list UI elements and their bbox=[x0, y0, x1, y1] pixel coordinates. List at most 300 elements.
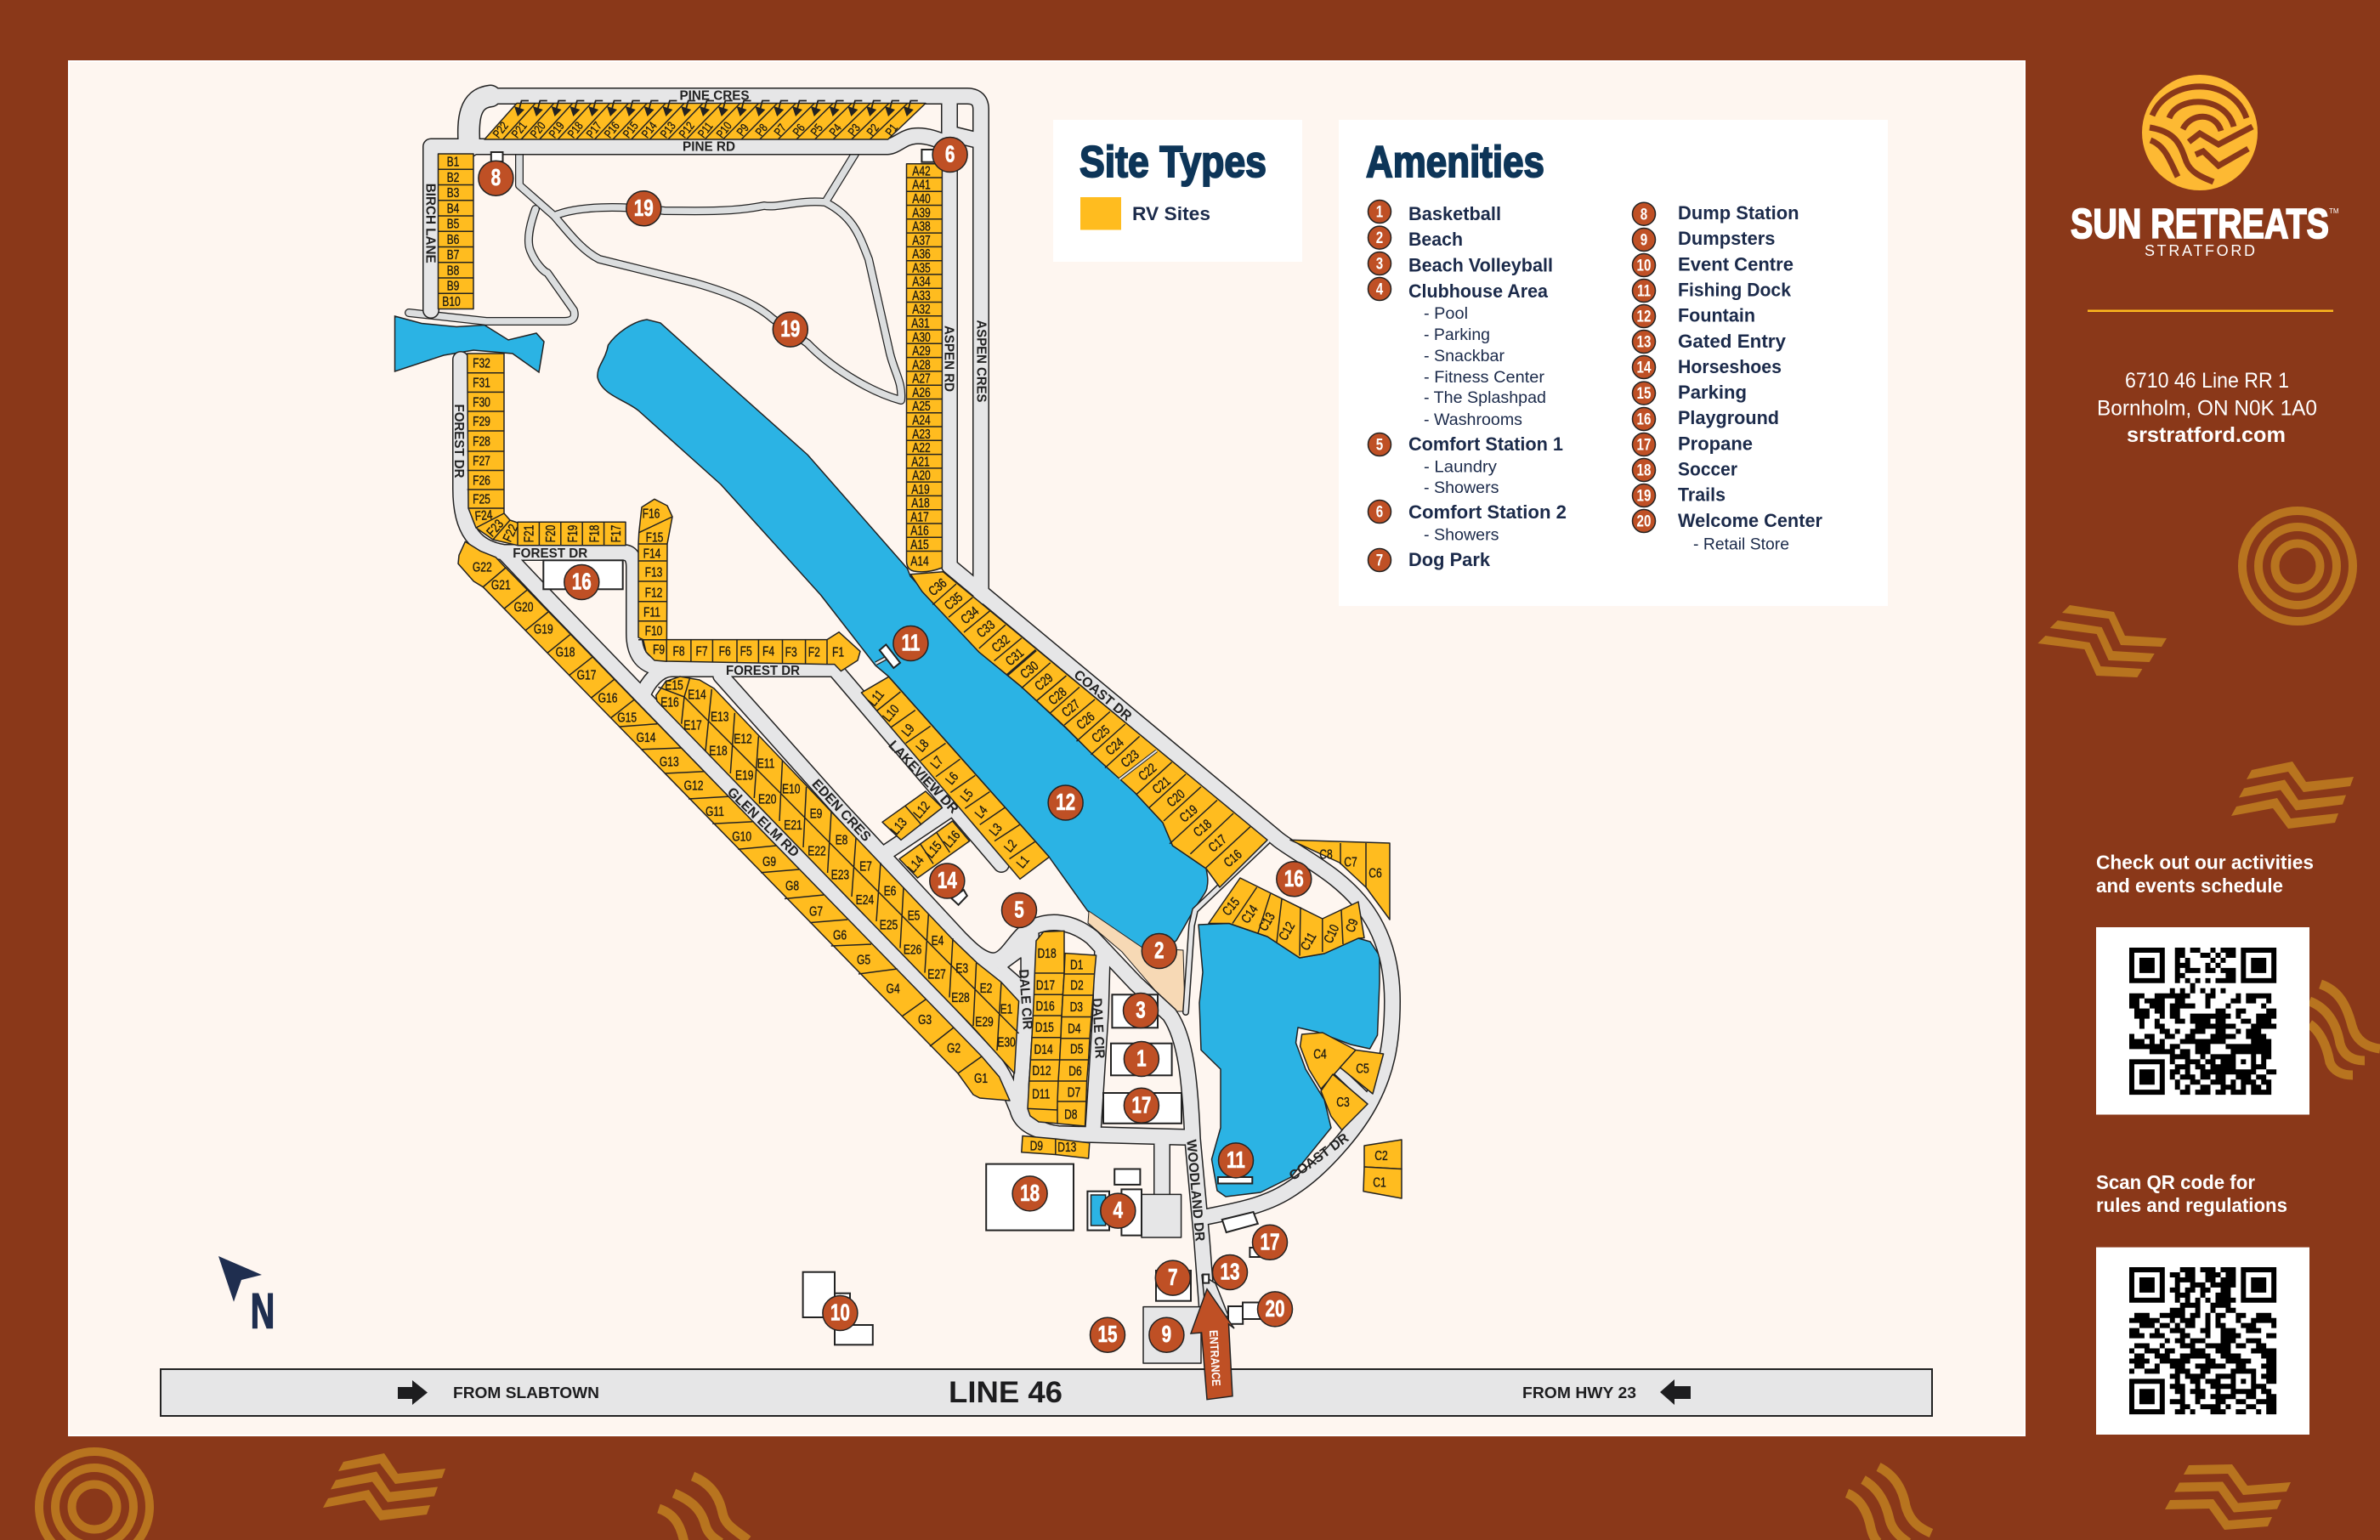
sites: G row: G3 bbox=[918, 1012, 932, 1027]
amenities column 1: Clubhouse Area bbox=[1408, 280, 1549, 302]
sites: P row: P5 bbox=[808, 122, 825, 139]
sites: P row: P10 bbox=[714, 120, 734, 140]
QR caption: and events schedule bbox=[2096, 875, 2283, 897]
amenities column 2: Fishing Dock bbox=[1678, 279, 1792, 301]
sites: E row: E11 bbox=[757, 756, 775, 771]
amenities column 1: 4 bbox=[1376, 280, 1384, 298]
sites: F row: F30 bbox=[473, 394, 490, 410]
icon: entrance arrow: ENTRANCE bbox=[1207, 1330, 1223, 1386]
panel: site map bbox=[161, 88, 1932, 1416]
road labels: PINE CRES bbox=[680, 88, 750, 103]
sites: E row: E18 bbox=[709, 743, 728, 758]
address: Bornholm, ON N0K 1A0 bbox=[2097, 397, 2317, 421]
sites: P row: P11 bbox=[695, 120, 716, 140]
road labels bbox=[423, 88, 1352, 1243]
sites: C row along lake: C23 bbox=[1118, 746, 1142, 770]
road labels: LAKEVIEW DR bbox=[886, 738, 961, 817]
sites: E row: E27 bbox=[927, 966, 946, 982]
sites: P row: P22 bbox=[490, 120, 511, 140]
sites: P row: P17 bbox=[584, 120, 604, 140]
road labels: FOREST DR bbox=[451, 405, 466, 478]
QR code bbox=[2096, 1248, 2309, 1435]
sites: A row: A27 bbox=[912, 371, 931, 386]
lake: main lake bbox=[598, 320, 1208, 948]
sites: G row: G13 bbox=[660, 754, 679, 769]
sites: F row: F11 bbox=[643, 604, 660, 620]
sites: P row: P15 bbox=[620, 120, 641, 140]
amenities column 2: Trails bbox=[1678, 484, 1726, 506]
amenities column 2: 16 bbox=[1637, 410, 1651, 428]
sites: C row around east lake: C8 bbox=[1319, 846, 1333, 862]
QR block: rules bbox=[2096, 1171, 2309, 1435]
sites: C row along lake: C24 bbox=[1102, 734, 1126, 758]
sites: D row: D1 bbox=[1070, 957, 1084, 972]
sites: C row along lake: C22 bbox=[1135, 760, 1159, 784]
sites: B row: B5 bbox=[447, 216, 460, 231]
sites: A row: A18 bbox=[911, 495, 930, 511]
amenities column 2: Gated Entry bbox=[1678, 331, 1787, 352]
Line 46 label: LINE 46 bbox=[949, 1376, 1062, 1409]
sites: B row bbox=[439, 154, 473, 309]
sites: B row: B1 bbox=[447, 154, 460, 169]
amenities column 1: - Snackbar bbox=[1424, 348, 1505, 365]
QR caption: rules and regulations bbox=[2096, 1194, 2287, 1216]
sites: P row: P18 bbox=[565, 120, 586, 140]
sites: G row: G22 bbox=[473, 559, 492, 575]
sites: F row bbox=[468, 354, 860, 671]
sites: L row: L10 bbox=[879, 701, 902, 724]
amenities column 2: 13 bbox=[1637, 332, 1651, 351]
map markers: 11 bbox=[901, 631, 921, 656]
sites: A row: A31 bbox=[911, 315, 930, 331]
sites: A row bbox=[906, 163, 942, 572]
sites: P row: P20 bbox=[528, 120, 548, 140]
panel: map background bbox=[69, 61, 2025, 1435]
sites: A row: A26 bbox=[912, 384, 931, 399]
sites: P row: P12 bbox=[677, 120, 697, 140]
sites: D row: D5 bbox=[1070, 1041, 1084, 1056]
map markers: 11 bbox=[1227, 1147, 1245, 1174]
map markers: 7 bbox=[1168, 1265, 1178, 1291]
map markers: 17 bbox=[1260, 1229, 1280, 1255]
sites: F row: F32 bbox=[473, 355, 490, 371]
map markers: 20 bbox=[1265, 1296, 1285, 1322]
sites: B row: B3 bbox=[447, 185, 460, 201]
amenities column 2: 9 bbox=[1640, 230, 1647, 249]
sites: E row: E12 bbox=[734, 731, 752, 746]
sites: P row: P19 bbox=[547, 120, 567, 140]
road labels: BIRCH LANE bbox=[423, 184, 437, 263]
sites: E row: E3 bbox=[955, 960, 968, 976]
sites: A row: A23 bbox=[912, 426, 931, 441]
sites: F row: F25 bbox=[473, 491, 490, 507]
sites: L row: L5 bbox=[957, 786, 976, 804]
amenities column 2: Welcome Center bbox=[1678, 510, 1822, 531]
sites: A row: A37 bbox=[912, 232, 931, 247]
sites: G row: G2 bbox=[947, 1040, 960, 1056]
road: Line 46 bbox=[161, 1369, 1932, 1416]
buildings and facilities bbox=[491, 150, 1266, 1345]
sites: E row: E16 bbox=[660, 694, 679, 710]
legend swatch: RV Sites bbox=[1080, 197, 1121, 229]
amenities column 1: 2 bbox=[1376, 229, 1383, 247]
sites: G row: G10 bbox=[732, 829, 751, 844]
amenities column 2: - Retail Store bbox=[1693, 536, 1789, 554]
sites: G row: G8 bbox=[785, 878, 799, 893]
amenities column 1: - Washrooms bbox=[1424, 411, 1522, 429]
sites: C row along lake: C17 bbox=[1205, 831, 1229, 855]
road network bbox=[431, 96, 1392, 1363]
sites: L row: L2 bbox=[1000, 836, 1020, 855]
sites: C row around east lake: C14 bbox=[1238, 902, 1261, 926]
sites: B row: B10 bbox=[442, 293, 461, 309]
sites: A row: A20 bbox=[912, 467, 931, 483]
sites: C row around east lake: C3 bbox=[1336, 1095, 1350, 1109]
map markers: 13 bbox=[1220, 1260, 1240, 1285]
map markers bbox=[479, 138, 1312, 1352]
sites: D row: D9 bbox=[1030, 1138, 1043, 1153]
amenities column 2: Dumpsters bbox=[1678, 228, 1775, 249]
sites: P row: P13 bbox=[658, 120, 678, 140]
icon: arrow from Slabtown bbox=[398, 1380, 428, 1405]
sites: E row: E20 bbox=[758, 791, 777, 807]
sites: B row: B7 bbox=[447, 247, 460, 263]
sites: G row bbox=[458, 541, 1010, 1101]
sites: A row: A15 bbox=[910, 536, 929, 552]
panel: amenities bbox=[1339, 120, 1888, 606]
label: from Hwy 23: FROM HWY 23 bbox=[1522, 1384, 1636, 1401]
sites: F row: F20 bbox=[542, 524, 558, 542]
map markers: 18 bbox=[1020, 1180, 1040, 1207]
sites: L row: L9 bbox=[898, 721, 917, 739]
map markers: 2 bbox=[1154, 938, 1164, 964]
road labels: GLEN ELM RD bbox=[724, 785, 802, 860]
sites: C row along lake: C31 bbox=[1002, 645, 1027, 669]
map markers: 3 bbox=[1136, 998, 1146, 1023]
QR caption bbox=[2096, 1171, 2287, 1216]
sites: P row: P6 bbox=[790, 122, 808, 139]
sites: C row around east lake: C15 bbox=[1219, 894, 1243, 919]
sites: D row: D11 bbox=[1032, 1086, 1051, 1101]
sites: E row: E17 bbox=[683, 717, 702, 733]
sites: P row: P1 bbox=[883, 122, 900, 139]
beach bbox=[1088, 911, 1185, 1011]
sites: C row along lake: C35 bbox=[941, 589, 966, 613]
sites: L row: L13 bbox=[887, 814, 910, 837]
QR block: activities bbox=[2096, 852, 2314, 1115]
sites: L row: L6 bbox=[942, 768, 961, 787]
sites: E row: E22 bbox=[808, 843, 826, 858]
sites: F row: F29 bbox=[473, 414, 490, 428]
sites: E row: E25 bbox=[880, 917, 898, 932]
sites: C row around east lake: C13 bbox=[1255, 909, 1278, 933]
amenities column 1: - Showers bbox=[1424, 479, 1499, 497]
sites: E row: E10 bbox=[782, 781, 801, 796]
sites: C row along lake: C25 bbox=[1088, 722, 1113, 745]
sites: A row: A28 bbox=[912, 357, 931, 372]
sites: C row along lake: C21 bbox=[1149, 773, 1173, 797]
map markers: 15 bbox=[1097, 1322, 1118, 1348]
amenities column 2: Dump Station bbox=[1678, 202, 1799, 224]
logo subtitle: STRATFORD bbox=[2145, 242, 2255, 259]
amenities column 1: Beach bbox=[1408, 229, 1463, 250]
sites: A row: A32 bbox=[912, 302, 931, 317]
sites: E row: E13 bbox=[711, 709, 729, 724]
sites: F row: F6 bbox=[719, 643, 731, 659]
amenities column 1: - Parking bbox=[1424, 326, 1490, 344]
sites: G row: G19 bbox=[534, 621, 553, 637]
sites: F row: F26 bbox=[473, 473, 490, 488]
sites: F row: F14 bbox=[643, 546, 661, 561]
sites: P row: P8 bbox=[753, 122, 770, 139]
address: srstratford.com bbox=[2127, 423, 2286, 447]
map markers: 9 bbox=[1162, 1322, 1171, 1348]
road labels: DALE CIR bbox=[1089, 998, 1107, 1059]
sites: C row along lake: C36 bbox=[925, 575, 949, 598]
sites: D row: D16 bbox=[1036, 999, 1055, 1014]
sites: F row: F15 bbox=[646, 529, 664, 545]
icon: arrow from Hwy 23 bbox=[1660, 1379, 1691, 1405]
amenities column 1: - Pool bbox=[1424, 305, 1468, 323]
QR code bbox=[2096, 927, 2309, 1115]
map markers: 17 bbox=[1131, 1092, 1151, 1118]
amenities column 2: 11 bbox=[1637, 281, 1651, 300]
amenities column 1: - Laundry bbox=[1424, 459, 1498, 477]
sites: C row along lake: C29 bbox=[1031, 670, 1056, 694]
sites: C row around east lake: C12 bbox=[1275, 919, 1298, 943]
sites: A row: A16 bbox=[910, 523, 929, 538]
sites: C row around east lake: C10 bbox=[1320, 922, 1342, 945]
sites: C row around east lake: C7 bbox=[1344, 854, 1357, 869]
amenities column 2: 15 bbox=[1637, 384, 1652, 403]
sites: F row: F3 bbox=[785, 644, 797, 660]
sites: E row: E1 bbox=[1000, 1001, 1013, 1016]
road labels: DALE CIR bbox=[1016, 969, 1034, 1030]
logo mark bbox=[2142, 75, 2258, 190]
sites: P row: P4 bbox=[827, 122, 844, 139]
sites: A row: A17 bbox=[910, 509, 929, 524]
sites: G row: G7 bbox=[809, 903, 823, 919]
amenities column 2: Fountain bbox=[1678, 305, 1755, 326]
amenities column 1 bbox=[1368, 201, 1567, 571]
sites: B row: B4 bbox=[447, 201, 460, 216]
sites: F row: F4 bbox=[762, 643, 774, 659]
road labels: COAST DR bbox=[1071, 668, 1135, 724]
map markers: 5 bbox=[1014, 897, 1024, 923]
map markers: 19 bbox=[780, 316, 800, 343]
sites: C row along lake: C27 bbox=[1058, 696, 1083, 720]
road labels: COAST DR bbox=[1287, 1130, 1352, 1184]
decorative pattern: rings and waves bbox=[39, 511, 2380, 1540]
sites: C row around east lake: C2 bbox=[1374, 1147, 1388, 1163]
sites: L row: L14 bbox=[904, 852, 926, 875]
sites: L row bbox=[861, 677, 1049, 879]
sites: F row: F12 bbox=[645, 585, 663, 600]
road labels: FOREST DR bbox=[726, 664, 800, 678]
sites: G row: G20 bbox=[514, 599, 534, 614]
sites: F row: F9 bbox=[653, 642, 665, 657]
sites: E row: E24 bbox=[856, 892, 874, 907]
sites: E row: E28 bbox=[951, 990, 970, 1005]
address bbox=[2097, 369, 2317, 447]
amenities column 1: - The Splashpad bbox=[1424, 389, 1546, 407]
sites: P row bbox=[484, 100, 926, 140]
trails bbox=[409, 154, 901, 400]
sites: C row around east lake: C9 bbox=[1342, 916, 1361, 934]
sites: F row: F18 bbox=[586, 524, 602, 542]
heading: Site Types: Site Types bbox=[1080, 138, 1266, 187]
sites: G row: G21 bbox=[491, 577, 511, 592]
sites: E row: E21 bbox=[784, 817, 802, 832]
map markers: 16 bbox=[572, 569, 592, 595]
sites: C row along lake: C33 bbox=[973, 616, 998, 641]
sites: C row around east lake: C1 bbox=[1373, 1175, 1386, 1190]
sites: E row: E8 bbox=[836, 832, 848, 847]
icon: entrance arrow bbox=[1191, 1289, 1234, 1400]
sites: A row: A33 bbox=[912, 287, 931, 303]
sites: C row along lake: C18 bbox=[1190, 816, 1215, 840]
sites: F row: F22 bbox=[500, 522, 521, 544]
amenities column 1: - Fitness Center bbox=[1424, 369, 1545, 387]
sites: A row: A38 bbox=[912, 218, 931, 234]
sites: C row around east lake: C4 bbox=[1313, 1046, 1327, 1062]
sites: G row: G17 bbox=[577, 667, 597, 682]
road labels: PINE RD bbox=[683, 139, 735, 155]
sites: E row: E19 bbox=[735, 767, 754, 783]
amenities column 1: - Showers bbox=[1424, 527, 1499, 544]
sites: B row: B9 bbox=[447, 278, 460, 293]
map markers: 19 bbox=[634, 195, 654, 222]
sites: D row: D2 bbox=[1070, 977, 1084, 993]
map markers: 14 bbox=[938, 868, 957, 894]
sites: B row: B8 bbox=[447, 263, 460, 278]
sites: F row: F8 bbox=[673, 643, 685, 659]
sidebar: logo and contact bbox=[2071, 75, 2339, 447]
sites: D row: D7 bbox=[1068, 1084, 1080, 1100]
sites: L row: L16 bbox=[940, 827, 963, 850]
sites: C row around east lake bbox=[1209, 840, 1402, 1198]
amenities column 2: 19 bbox=[1637, 486, 1651, 505]
sites: F row: F16 bbox=[643, 506, 660, 521]
sites: A row: A42 bbox=[912, 163, 931, 178]
sites: C row along lake: C30 bbox=[1017, 658, 1041, 682]
sites: G row: G4 bbox=[887, 981, 900, 996]
sites: C row along lake: C34 bbox=[957, 603, 982, 627]
road labels: ASPEN RD bbox=[942, 326, 955, 392]
amenities column 2: 14 bbox=[1637, 358, 1652, 377]
amenities column 1: 5 bbox=[1376, 435, 1384, 454]
amenities column 1: 1 bbox=[1376, 202, 1384, 221]
sites: B row: B2 bbox=[447, 169, 460, 184]
map markers: 16 bbox=[1284, 866, 1304, 892]
sites: E row: E23 bbox=[831, 867, 849, 882]
logo trademark: TM bbox=[2329, 207, 2339, 215]
sites: D row: D6 bbox=[1068, 1063, 1082, 1079]
sites: D row: D15 bbox=[1035, 1019, 1054, 1034]
sites: P row: P2 bbox=[864, 122, 881, 139]
heading: Amenities: Amenities bbox=[1366, 138, 1544, 187]
sites: L row: L7 bbox=[927, 753, 946, 772]
sites: C row along lake: C26 bbox=[1074, 709, 1097, 733]
sites: G row: G1 bbox=[974, 1071, 988, 1086]
road labels: EDEN CRES bbox=[808, 777, 874, 845]
sites: C row along lake: C20 bbox=[1164, 786, 1187, 810]
amenities column 2: Horseshoes bbox=[1678, 356, 1782, 377]
amenities column 1: 6 bbox=[1376, 502, 1383, 521]
sites: C row along lake bbox=[910, 572, 1267, 887]
sites: A row: A29 bbox=[912, 343, 931, 358]
QR caption: Scan QR code for bbox=[2096, 1171, 2255, 1193]
sites: A row: A30 bbox=[912, 329, 931, 344]
sites: D row: D14 bbox=[1034, 1042, 1053, 1057]
sites: C row around east lake: C5 bbox=[1356, 1061, 1369, 1076]
sites: F row: F7 bbox=[696, 643, 708, 659]
sites: F row: F23 bbox=[483, 516, 507, 540]
sites: G row: G6 bbox=[833, 927, 847, 943]
sites: E row: E15 bbox=[665, 677, 683, 693]
sites: A row: A35 bbox=[912, 260, 931, 275]
sites: F row: F21 bbox=[521, 524, 536, 542]
sites: E row bbox=[656, 677, 1019, 1073]
sites: G row: G9 bbox=[762, 853, 776, 869]
sites: G row: G11 bbox=[706, 803, 724, 818]
map markers: 4 bbox=[1114, 1197, 1123, 1224]
road labels: WOODLAND DR bbox=[1183, 1139, 1207, 1243]
sites: L row: L3 bbox=[986, 820, 1005, 839]
sites: E row: E6 bbox=[884, 883, 897, 898]
sites: L row: L1 bbox=[1013, 852, 1032, 871]
amenities column 2: 17 bbox=[1637, 435, 1651, 454]
sites: F row: F10 bbox=[645, 623, 663, 638]
sites: E row: E29 bbox=[975, 1014, 994, 1029]
sites: F row: F13 bbox=[645, 564, 663, 580]
sites: G row: G5 bbox=[857, 952, 870, 967]
sites: P row: P21 bbox=[509, 120, 530, 140]
sites: C row around east lake: C11 bbox=[1297, 930, 1319, 953]
amenities column 1: Beach Volleyball bbox=[1408, 255, 1553, 275]
sites: L row: L11 bbox=[864, 687, 887, 709]
sites: G row: G12 bbox=[684, 778, 704, 793]
sites: A row: A19 bbox=[911, 481, 930, 496]
amenities column 2: 20 bbox=[1637, 512, 1651, 530]
amenities column 2: 8 bbox=[1640, 205, 1648, 224]
QR caption: Check out our activities bbox=[2096, 852, 2314, 874]
sites: A row: A24 bbox=[912, 412, 931, 427]
sites: E row: E4 bbox=[932, 933, 944, 948]
road labels: ASPEN CRES bbox=[974, 320, 988, 403]
amenities column 1: 7 bbox=[1376, 551, 1383, 569]
map markers: 6 bbox=[945, 142, 955, 167]
sites: A row: A36 bbox=[912, 246, 931, 261]
road labels: FOREST DR bbox=[513, 546, 588, 561]
sites: A row: A14 bbox=[910, 553, 929, 569]
panel: site types legend bbox=[1053, 120, 1302, 262]
sites: D row: D18 bbox=[1038, 946, 1057, 961]
sites: F row: F31 bbox=[473, 375, 490, 390]
sites: L row: L12 bbox=[910, 798, 932, 821]
sites: E row: E2 bbox=[980, 980, 993, 995]
sites: G row: G18 bbox=[556, 644, 575, 660]
sites: F row: F1 bbox=[832, 644, 844, 660]
sites: F row: F27 bbox=[473, 453, 490, 468]
sites: P row: P14 bbox=[639, 120, 660, 140]
map markers: 8 bbox=[491, 165, 501, 191]
amenities column 1: Dog Park bbox=[1408, 549, 1491, 570]
sites: E row: E14 bbox=[688, 687, 706, 702]
amenities column 1: Basketball bbox=[1408, 203, 1501, 224]
sites: F row: F2 bbox=[808, 644, 820, 660]
icon: north arrow bbox=[218, 1256, 275, 1339]
